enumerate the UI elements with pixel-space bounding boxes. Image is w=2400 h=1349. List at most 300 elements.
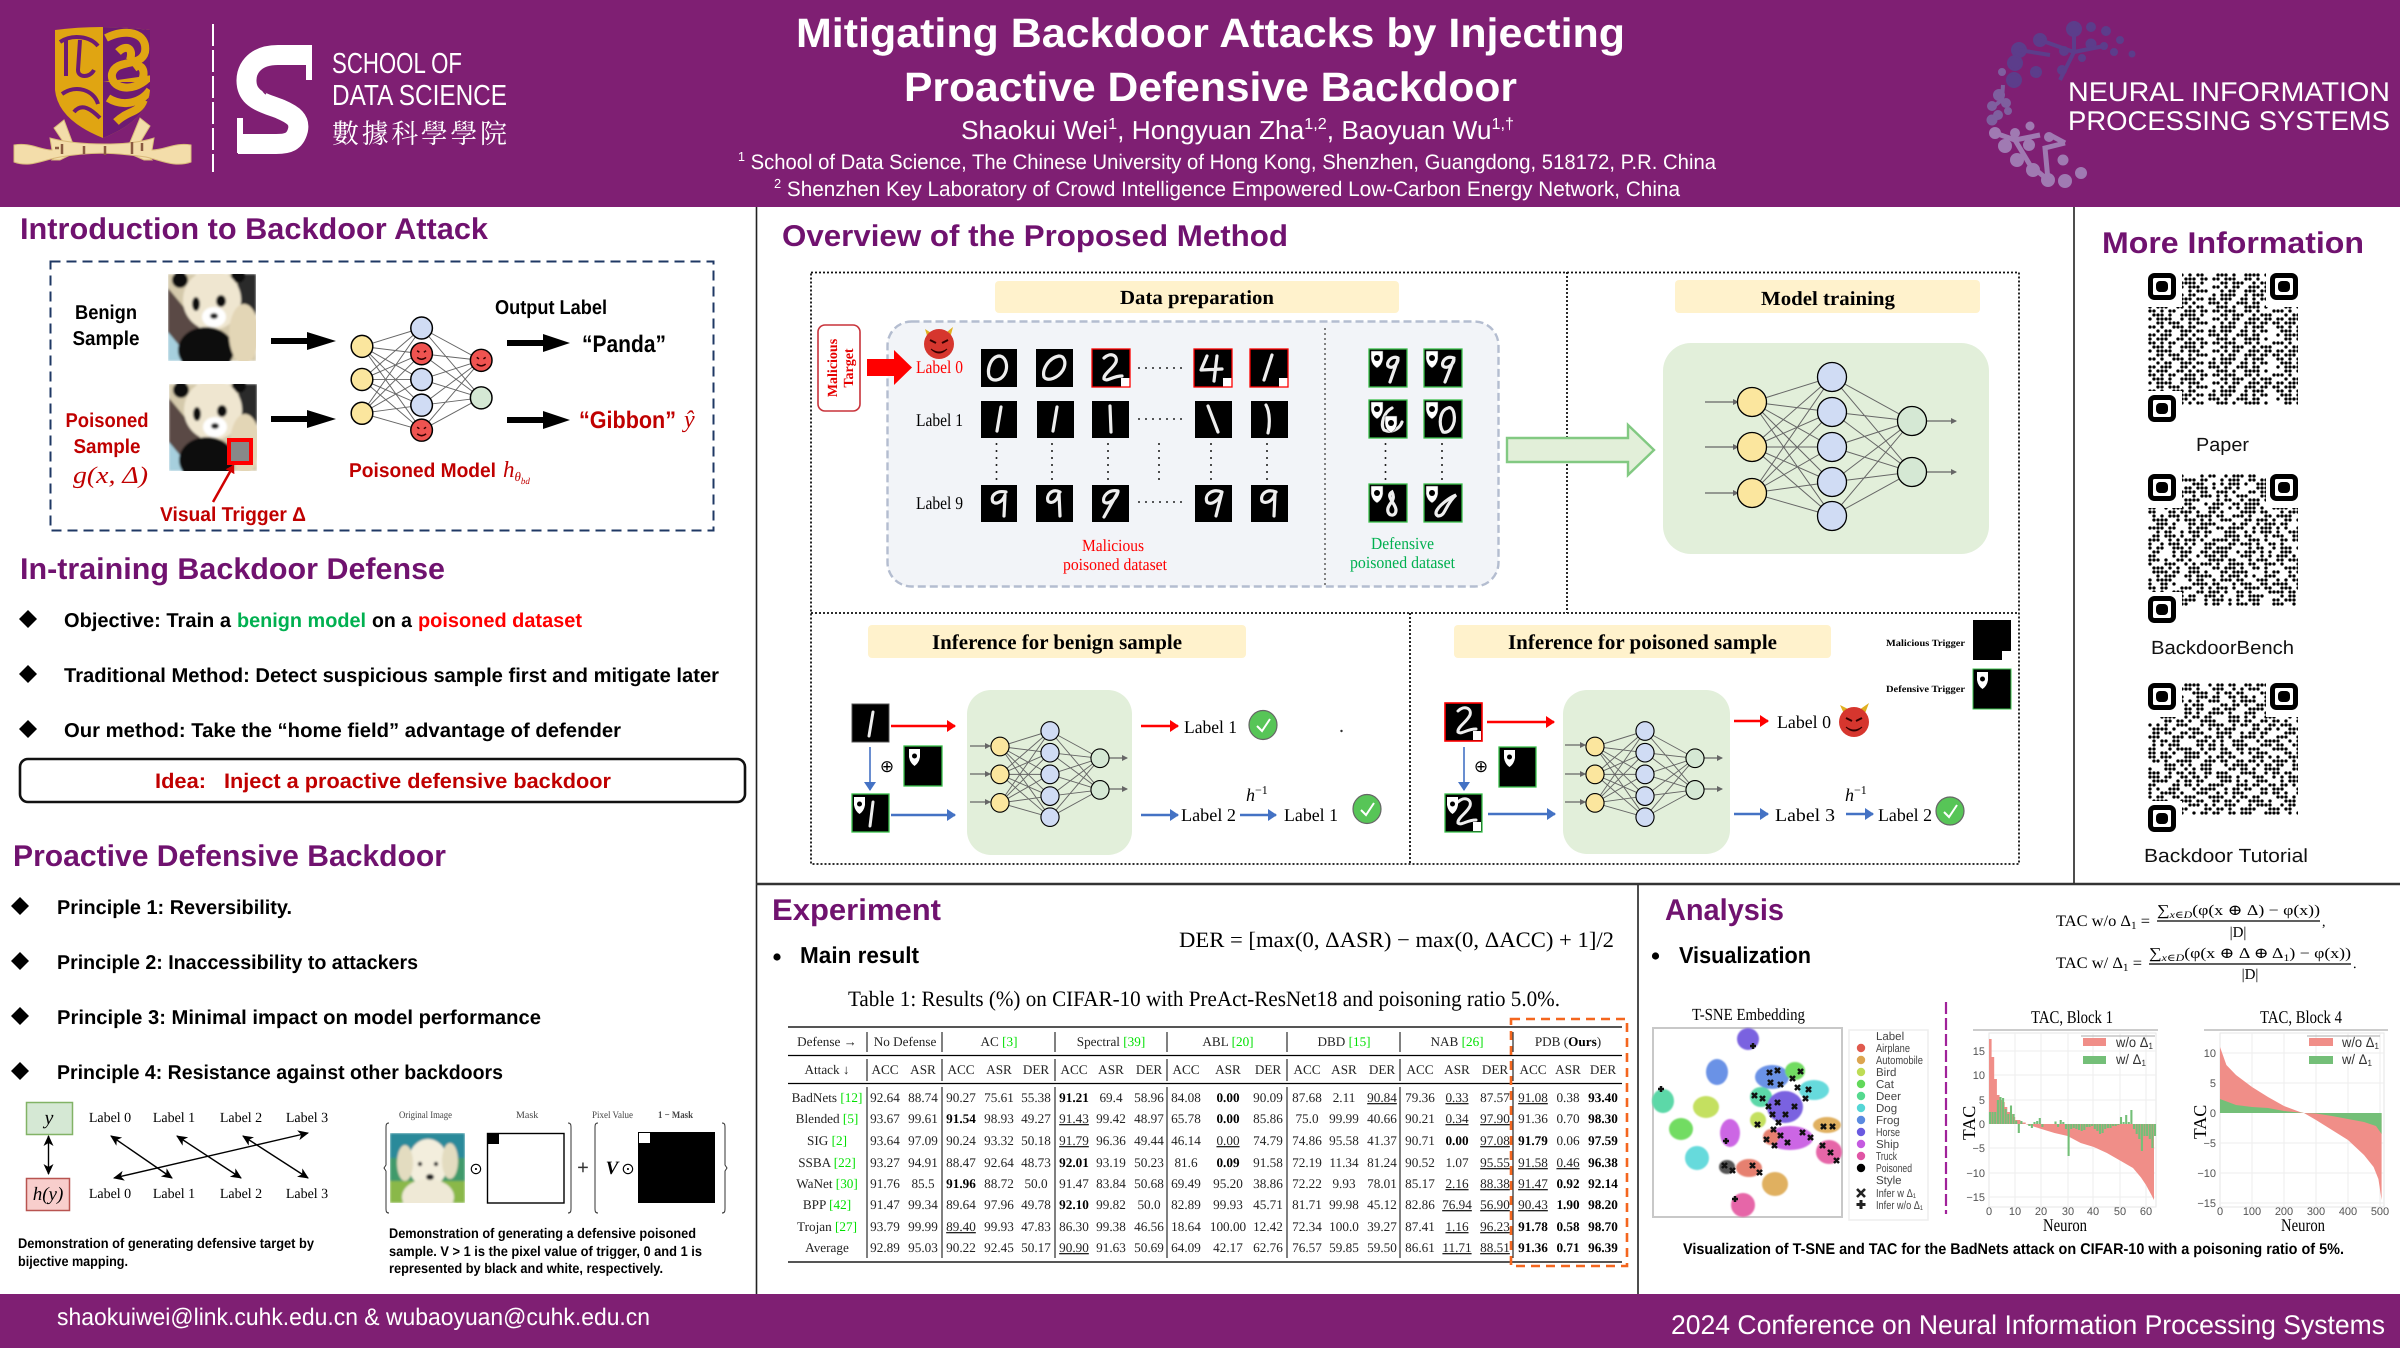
x ticks: 10: [2009, 1206, 2021, 1218]
poisoned result labels: Label 3: [1775, 805, 1835, 825]
legend: T-SNE: Deer: [1876, 1091, 1901, 1103]
table metric row: ACC: [1293, 1062, 1321, 1077]
formula: TAC with trigger: .: [2353, 957, 2356, 972]
table row: BadNets: 55.38: [1021, 1090, 1051, 1105]
poisoned result labels: Label 2: [1878, 805, 1932, 825]
table row: Trojan: 99.38: [1096, 1219, 1126, 1234]
table row: BPP: 99.93: [1213, 1197, 1243, 1212]
bullets: in-training defense: on a: [372, 610, 413, 632]
legend: T-SNE: Automobile: [1876, 1055, 1923, 1067]
table row: BadNets: 90.27: [946, 1090, 976, 1105]
malicious target tag: Malicious: [826, 338, 841, 397]
legend: w/o Δ: [2116, 1034, 2151, 1050]
table row: WaNet: 91.47: [1059, 1176, 1089, 1191]
green bars: [1990, 1097, 2155, 1156]
formula: TAC with trigger: (φ(x ⊕ Δ ⊕ Δ: [2184, 946, 2284, 962]
table row: Average: Average: [805, 1240, 849, 1255]
bullets: in-training defense: [19, 610, 719, 742]
caption: bijective mapping: bijective mapping.: [18, 1253, 128, 1269]
benign result labels: Label 2: [1181, 805, 1236, 825]
logo: school of data science S: [238, 46, 312, 153]
table row: Average: 90.22: [946, 1240, 976, 1255]
table row: WaNet: 91.47: [1518, 1176, 1548, 1191]
table row: BPP: BPP [42]: [803, 1197, 851, 1212]
x ticks: 50: [2114, 1206, 2126, 1218]
diagram: bijective mapping: Label 0: [89, 1111, 131, 1126]
poisoned check icon: [1936, 797, 1964, 825]
table row: Trojan: 0.58: [1556, 1219, 1580, 1234]
table row: SSBA: 81.6: [1174, 1155, 1198, 1170]
table row: BadNets: 2.11: [1333, 1090, 1355, 1105]
benign result labels: Label 1: [1184, 717, 1237, 737]
table row: Blended: 91.54: [946, 1111, 976, 1126]
target arrow: [867, 350, 912, 385]
diagram: defensive poisoned sample: 1 − Mask: [658, 1110, 693, 1121]
chart: TAC block 1: [1959, 1007, 2158, 1235]
table row: Average: 62.76: [1253, 1240, 1283, 1255]
table row: SSBA: 91.58: [1518, 1155, 1548, 1170]
y ticks: −5: [1972, 1143, 1985, 1155]
table row: WaNet: 85.17: [1405, 1176, 1435, 1191]
diagram: bijective mapping: Label 2: [220, 1187, 262, 1202]
diagram: bijective mapping: Label 2: [220, 1111, 262, 1126]
table row: Trojan: 98.70: [1588, 1219, 1618, 1234]
dashed logo divider: [212, 24, 214, 172]
table header row: AC [3]: [980, 1034, 1018, 1049]
red area: [2220, 1047, 2382, 1200]
dataset row labels: [916, 357, 963, 513]
authors: 1: [1108, 116, 1117, 133]
defensive dataset label: poisoned dataset: [1350, 553, 1455, 572]
table row: BPP: 99.34: [908, 1197, 938, 1212]
table metric row: ACC: [1060, 1062, 1088, 1077]
trigger legend: [1886, 620, 2011, 709]
affiliations: 2: [774, 176, 781, 191]
table row: SIG: 91.79: [1059, 1133, 1089, 1148]
panel: inference poisoned: [1445, 620, 2011, 854]
table metric row: ASR: [1215, 1062, 1241, 1077]
school name: DATA SCIENCE: [332, 80, 507, 112]
table metric row: DER: [1255, 1062, 1281, 1077]
footer band: [0, 1294, 2400, 1348]
table metric row: ASR: [1098, 1062, 1124, 1077]
caption: defensive poisoned sample: Demonstration of generating a defensive poisoned: [389, 1225, 696, 1241]
legend: w/o Δ: [2342, 1034, 2377, 1050]
benign check icons: [1249, 710, 1381, 824]
table row: SIG: 74.86: [1292, 1133, 1322, 1148]
defensive dataset label: [1350, 534, 1455, 572]
legend: 1: [2148, 1041, 2153, 1051]
legend: w/ Δ: [2116, 1051, 2143, 1067]
table row: SIG: 95.58: [1329, 1133, 1359, 1148]
table metric row: DER: [1023, 1062, 1049, 1077]
poisoned sample label: g(x, Δ): [73, 463, 148, 489]
QR label: BackdoorBench: BackdoorBench: [2151, 638, 2294, 659]
table row: SSBA: 95.55: [1480, 1155, 1510, 1170]
bullets: in-training defense: Our method: Take the “home field” advantage of defender: [64, 720, 621, 742]
table row: Blended: 40.66: [1367, 1111, 1397, 1126]
table row: SSBA: 48.73: [1021, 1155, 1051, 1170]
affiliations: Shenzhen Key Laboratory of Crowd Intelligence Empowered Low-Carbon Energy Network, China: [781, 178, 1680, 201]
school name: 數據科學學院: [332, 112, 507, 151]
table row: Trojan: 46.56: [1134, 1219, 1164, 1234]
poisoned markers: [1658, 1043, 1839, 1202]
poisoned sample label: Poisoned: [66, 410, 148, 432]
table row: WaNet: 50.0: [1024, 1176, 1048, 1191]
x ticks: 400: [2339, 1206, 2357, 1218]
table row: BPP: 49.78: [1021, 1197, 1051, 1212]
table row: BadNets: 75.61: [984, 1090, 1014, 1105]
bullets: in-training defense: Objective: Train a: [64, 610, 232, 632]
formula: TAC with trigger: [2056, 946, 2356, 983]
table row: Trojan: 93.79: [870, 1219, 900, 1234]
table row: SSBA: 93.27: [870, 1155, 900, 1170]
table row: Blended: 49.27: [1021, 1111, 1051, 1126]
benign result labels: −1: [1255, 783, 1268, 797]
poisoned result labels: −1: [1854, 783, 1867, 797]
table row: Trojan: 100.00: [1210, 1219, 1247, 1234]
output panda: “Panda”: [582, 331, 666, 358]
table row: BadNets: 0.00: [1216, 1090, 1240, 1105]
authors: , Hongyuan Zha: [1117, 115, 1305, 145]
red bars: [1989, 1039, 2154, 1200]
table row: SSBA: 96.38: [1588, 1155, 1618, 1170]
diagram: defensive poisoned sample: V: [606, 1158, 620, 1179]
table row: Blended: 93.67: [870, 1111, 900, 1126]
table row: SIG: 90.71: [1405, 1133, 1435, 1148]
malicious dataset label: Malicious: [1082, 536, 1144, 555]
table row: BPP: 50.0: [1137, 1197, 1161, 1212]
legend: [2307, 1034, 2380, 1068]
QR label: tutorial: Backdoor Tutorial: [2144, 846, 2308, 867]
logo: NeurIPS: [1988, 22, 2390, 187]
bullets: principles: Principle 1: Reversibility.: [57, 897, 292, 919]
formula: TAC without trigger: =: [2137, 913, 2150, 930]
poisoned inference network: [1563, 690, 1730, 854]
table metric row: DER: [1136, 1062, 1162, 1077]
malicious target tag: [818, 325, 860, 411]
table header row: Spectral [39]: [1077, 1034, 1145, 1049]
table row: SIG: 50.18: [1021, 1133, 1051, 1148]
table row: BPP: 81.71: [1292, 1197, 1322, 1212]
table row: Trojan: 100.0: [1329, 1219, 1359, 1234]
y ticks: −5: [2203, 1138, 2216, 1150]
authors: 1,†: [1491, 116, 1514, 133]
diagram: bijective mapping: Label 3: [286, 1187, 328, 1202]
y ticks: 10: [2204, 1048, 2216, 1060]
chart: TAC block 4: [2190, 1007, 2389, 1235]
table row: SSBA: 11.34: [1329, 1155, 1359, 1170]
y ticks: −10: [2197, 1168, 2216, 1180]
table row: SIG: 0.00: [1445, 1133, 1469, 1148]
idea callout: [20, 759, 745, 802]
output arrows: [507, 334, 570, 429]
dataset row labels: Label 9: [916, 493, 963, 513]
table row: Average: 88.51: [1480, 1240, 1510, 1255]
output gibbon: ŷ: [682, 407, 695, 433]
table row: SIG: 93.64: [870, 1133, 900, 1148]
bullets: principles: Principle 4: Resistance against other backdoors: [57, 1062, 503, 1084]
devil result icon: [1839, 703, 1869, 737]
QR code: paper: [2146, 271, 2302, 427]
legend: T-SNE: Infer w Δ₁: [1876, 1188, 1916, 1200]
legend: T-SNE: Style: [1876, 1175, 1902, 1187]
table metric row: DER: [1590, 1062, 1616, 1077]
x ticks: 0: [2217, 1206, 2223, 1218]
table row: Trojan: 18.64: [1171, 1219, 1201, 1234]
QR label: paper: Paper: [2196, 435, 2250, 456]
table row: BPP: 90.43: [1518, 1197, 1548, 1212]
benign inference tag: [868, 625, 1246, 658]
table row: Average: 86.61: [1405, 1240, 1435, 1255]
table row: Average: 91.36: [1518, 1240, 1548, 1255]
table row: Average: 11.71: [1442, 1240, 1472, 1255]
trigger legend: Defensive Trigger: [1886, 685, 1966, 695]
table metric row: ACC: [947, 1062, 975, 1077]
table row: SSBA: 90.52: [1405, 1155, 1435, 1170]
table row: BadNets: 79.36: [1405, 1090, 1435, 1105]
table row: Average: 91.63: [1096, 1240, 1126, 1255]
table row: Blended: 0.70: [1556, 1111, 1580, 1126]
table row: Trojan: 99.99: [908, 1219, 938, 1234]
benign inference network: [967, 690, 1132, 855]
table row: BadNets: 91.21: [1059, 1090, 1089, 1105]
table row: SSBA: 0.46: [1556, 1155, 1580, 1170]
table row: BPP: 76.94: [1442, 1197, 1472, 1212]
diagram: bijective mapping: Label 3: [286, 1111, 328, 1126]
legend: 1: [2367, 1058, 2372, 1068]
table row: BPP: 99.98: [1329, 1197, 1359, 1212]
table row: Blended: 98.30: [1588, 1111, 1618, 1126]
output gibbon: “Gibbon”: [579, 407, 676, 434]
caption: defensive poisoned sample: sample. V > 1 is the pixel value of trigger, 0 and 1 is: [389, 1243, 702, 1259]
formula: TAC with trigger: 1: [2123, 962, 2129, 974]
x ticks: 40: [2087, 1206, 2099, 1218]
legend: T-SNE: Dog: [1876, 1103, 1897, 1115]
table row: SIG: 97.09: [908, 1133, 938, 1148]
table row: BadNets: 88.74: [908, 1090, 938, 1105]
table row: Blended: 90.21: [1405, 1111, 1435, 1126]
table row: Average: 64.09: [1171, 1240, 1201, 1255]
table row: BadNets: 90.09: [1253, 1090, 1283, 1105]
model training tag: [1675, 280, 1980, 313]
table row: Blended: 99.61: [908, 1111, 938, 1126]
table row: WaNet: 2.16: [1445, 1176, 1469, 1191]
table metric row: ASR: [1555, 1062, 1581, 1077]
x ticks: [2217, 1206, 2389, 1218]
benign sample label: Sample: [72, 328, 140, 350]
output label text: Output Label: [495, 297, 607, 319]
x ticks: 60: [2140, 1206, 2152, 1218]
formula: TAC with trigger: 1: [2283, 953, 2289, 964]
formula: DER: DER = [max(0, ΔASR) − max(0, ΔACC) + 1]/2: [1179, 927, 1614, 952]
poisoned model label: θ: [514, 469, 522, 484]
table metric row: ACC: [1519, 1062, 1547, 1077]
table row: SIG: 96.36: [1096, 1133, 1126, 1148]
table row: Blended: 85.86: [1253, 1111, 1283, 1126]
dog image: [390, 1133, 465, 1203]
table row: WaNet: 95.20: [1213, 1176, 1243, 1191]
table row: SSBA: 94.91: [908, 1155, 938, 1170]
table row: BPP: 82.89: [1171, 1197, 1201, 1212]
table row: BadNets: 93.40: [1588, 1090, 1618, 1105]
title: Proactive Defensive Backdoor: [904, 64, 1517, 110]
bullets: in-training defense: poisoned dataset: [418, 610, 582, 632]
table row: BadNets: 92.64: [870, 1090, 900, 1105]
legend: T-SNE: Truck: [1876, 1151, 1897, 1163]
logo: NeurIPS: NEURAL INFORMATION: [2068, 77, 2390, 107]
results table: [788, 1027, 1622, 1262]
table row: BPP: 45.12: [1367, 1197, 1397, 1212]
table row: SSBA: 93.19: [1096, 1155, 1126, 1170]
highlight box: PDB column: [1511, 1019, 1627, 1266]
table row: Average: 76.57: [1292, 1240, 1322, 1255]
table row: WaNet: 69.49: [1171, 1176, 1201, 1191]
table row: Trojan: 89.40: [946, 1219, 976, 1234]
poisoned inference tag: [1454, 625, 1831, 658]
table row: Blended: 48.97: [1134, 1111, 1164, 1126]
formula: TAC with trigger: ) − φ(x)): [2289, 946, 2351, 962]
heading: overview: Overview of the Proposed Method: [782, 220, 1288, 253]
title: Mitigating Backdoor Attacks by Injecting: [796, 10, 1625, 56]
MNIST samples: malicious: [981, 349, 1288, 522]
table row: Blended: 97.90: [1480, 1111, 1510, 1126]
table row: SIG: 74.79: [1253, 1133, 1283, 1148]
affiliations: 1: [738, 149, 745, 164]
flow arrow: data to model: [1507, 425, 1654, 475]
table metric row: ACC: [1172, 1062, 1200, 1077]
x ticks: 20: [2035, 1206, 2047, 1218]
table row: SSBA: 81.24: [1367, 1155, 1397, 1170]
y ticks: −10: [1966, 1168, 1985, 1180]
panel: backdoor attack illustration: [50, 262, 714, 530]
heading: introduction: Introduction to Backdoor Attack: [20, 213, 488, 246]
table row: BadNets: 87.57: [1480, 1090, 1510, 1105]
table row: Blended: 75.0: [1295, 1111, 1319, 1126]
heading: in-training defense: In-training Backdoor Defense: [20, 553, 445, 586]
bullets: in-training defense: Traditional Method: Detect suspicious sample first and mitigate later: [64, 665, 719, 687]
table row: BPP: 98.20: [1588, 1197, 1618, 1212]
table row: SSBA: 92.01: [1059, 1155, 1089, 1170]
idea callout: Inject a proactive defensive backdoor: [224, 770, 611, 793]
y ticks: [1966, 1046, 1985, 1204]
input arrows: [271, 332, 336, 428]
table row: Average: 95.03: [908, 1240, 938, 1255]
chart: TAC block 4: TAC: [2190, 1105, 2210, 1139]
x ticks: 30: [2062, 1206, 2074, 1218]
table row: Blended: 91.36: [1518, 1111, 1548, 1126]
poisoned inference tag: Inference for poisoned sample: [1508, 630, 1777, 654]
legend: T-SNE: Frog: [1876, 1115, 1900, 1127]
diagram: bijective mapping: [26, 1102, 328, 1210]
table row: SIG: 90.24: [946, 1133, 976, 1148]
table row: BadNets: 91.08: [1518, 1090, 1548, 1105]
x ticks: 500: [2371, 1206, 2389, 1218]
heading: proactive defensive backdoor: Proactive Defensive Backdoor: [13, 840, 446, 873]
idea callout: Idea:: [155, 770, 206, 793]
table row: WaNet: 78.01: [1367, 1176, 1397, 1191]
legend: T-SNE: Label: [1876, 1031, 1904, 1043]
table row: WaNet: 85.5: [911, 1176, 935, 1191]
chart: TAC block 1: TAC, Block 1: [2031, 1007, 2113, 1027]
legend: T-SNE: Horse: [1876, 1127, 1900, 1139]
caption: defensive poisoned sample: represented by black and white, respectively.: [389, 1260, 663, 1276]
diagram: defensive poisoned sample: +: [577, 1157, 589, 1179]
bullet: visualization: Visualization: [1679, 942, 1811, 968]
table row: Trojan: 47.83: [1021, 1219, 1051, 1234]
diagram: defensive poisoned sample: Original Image: [399, 1110, 452, 1121]
legend: [2081, 1034, 2155, 1068]
table row: Trojan: 39.27: [1367, 1219, 1397, 1234]
affiliations: School of Data Science, The Chinese University of Hong Kong, Shenzhen, Guangdong, 518172, P.R. China: [745, 151, 1716, 174]
y ticks: 15: [1973, 1046, 1985, 1058]
table row: Blended: 91.43: [1059, 1111, 1089, 1126]
table row: BPP: 56.90: [1480, 1197, 1510, 1212]
table row: Average: 0.71: [1556, 1240, 1580, 1255]
table row: Average: 59.85: [1329, 1240, 1359, 1255]
table row: Trojan: Trojan [27]: [797, 1219, 857, 1234]
trigger legend: Malicious Trigger: [1886, 639, 1966, 649]
table row: BPP: 1.90: [1556, 1197, 1580, 1212]
panel: inference benign: [852, 625, 1381, 855]
y ticks: 10: [1973, 1070, 1985, 1082]
scatter clusters: [1652, 1028, 1842, 1217]
diagram: bijective mapping: Label 1: [153, 1111, 195, 1126]
malicious dataset label: poisoned dataset: [1063, 555, 1167, 574]
table metric row: ASR: [1444, 1062, 1470, 1077]
table row: SIG: 97.59: [1588, 1133, 1618, 1148]
table row: Trojan: 12.42: [1253, 1219, 1283, 1234]
table row: Average: 42.17: [1213, 1240, 1243, 1255]
green area: [2220, 1099, 2382, 1134]
table row: WaNet: WaNet [30]: [796, 1176, 858, 1191]
table metric row: ASR: [910, 1062, 936, 1077]
table metric row: DER: [1369, 1062, 1395, 1077]
table row: BadNets: 58.96: [1134, 1090, 1164, 1105]
benign samples: [852, 704, 942, 832]
x ticks: 200: [2275, 1206, 2293, 1218]
formula: TAC with trigger: |D|: [2242, 967, 2258, 983]
y ticks: −15: [1966, 1192, 1985, 1204]
benign panda image: [168, 274, 256, 361]
table metric row: DER: [1482, 1062, 1508, 1077]
table metric row: ASR: [1331, 1062, 1357, 1077]
legend: w/ Δ: [2342, 1051, 2369, 1067]
legend: T-SNE: Bird: [1876, 1067, 1896, 1079]
footer: conference: 2024 Conference on Neural Information Processing Systems: [1671, 1310, 2385, 1340]
formula: TAC without trigger: x∈D: [2168, 910, 2193, 921]
poisoned network: [351, 317, 492, 441]
legend: T-SNE: Cat: [1876, 1079, 1895, 1091]
table row: WaNet: 0.92: [1556, 1176, 1580, 1191]
chart: TAC block 4: TAC, Block 4: [2260, 1007, 2342, 1027]
dataset row labels: Label 1: [916, 410, 963, 430]
formula: TAC without trigger: [2056, 903, 2326, 941]
diagram: defensive poisoned sample: [384, 1110, 727, 1215]
table header row: NAB [26]: [1430, 1034, 1484, 1049]
formula: TAC with trigger: TAC w/ Δ: [2056, 955, 2121, 972]
y ticks: 0: [1979, 1119, 1985, 1131]
caption: bijective mapping: Demonstration of generating defensive target by: [18, 1235, 314, 1251]
table row: Trojan: 87.41: [1405, 1219, 1435, 1234]
school name: [332, 48, 507, 151]
legend: T-SNE: Poisoned: [1876, 1163, 1912, 1175]
poisoned model label: h: [503, 457, 514, 482]
school name: SCHOOL OF: [332, 48, 462, 80]
legend: T-SNE: [1849, 1030, 1928, 1220]
table row: WaNet: 38.86: [1253, 1176, 1283, 1191]
panel: data preparation: [888, 322, 1498, 586]
